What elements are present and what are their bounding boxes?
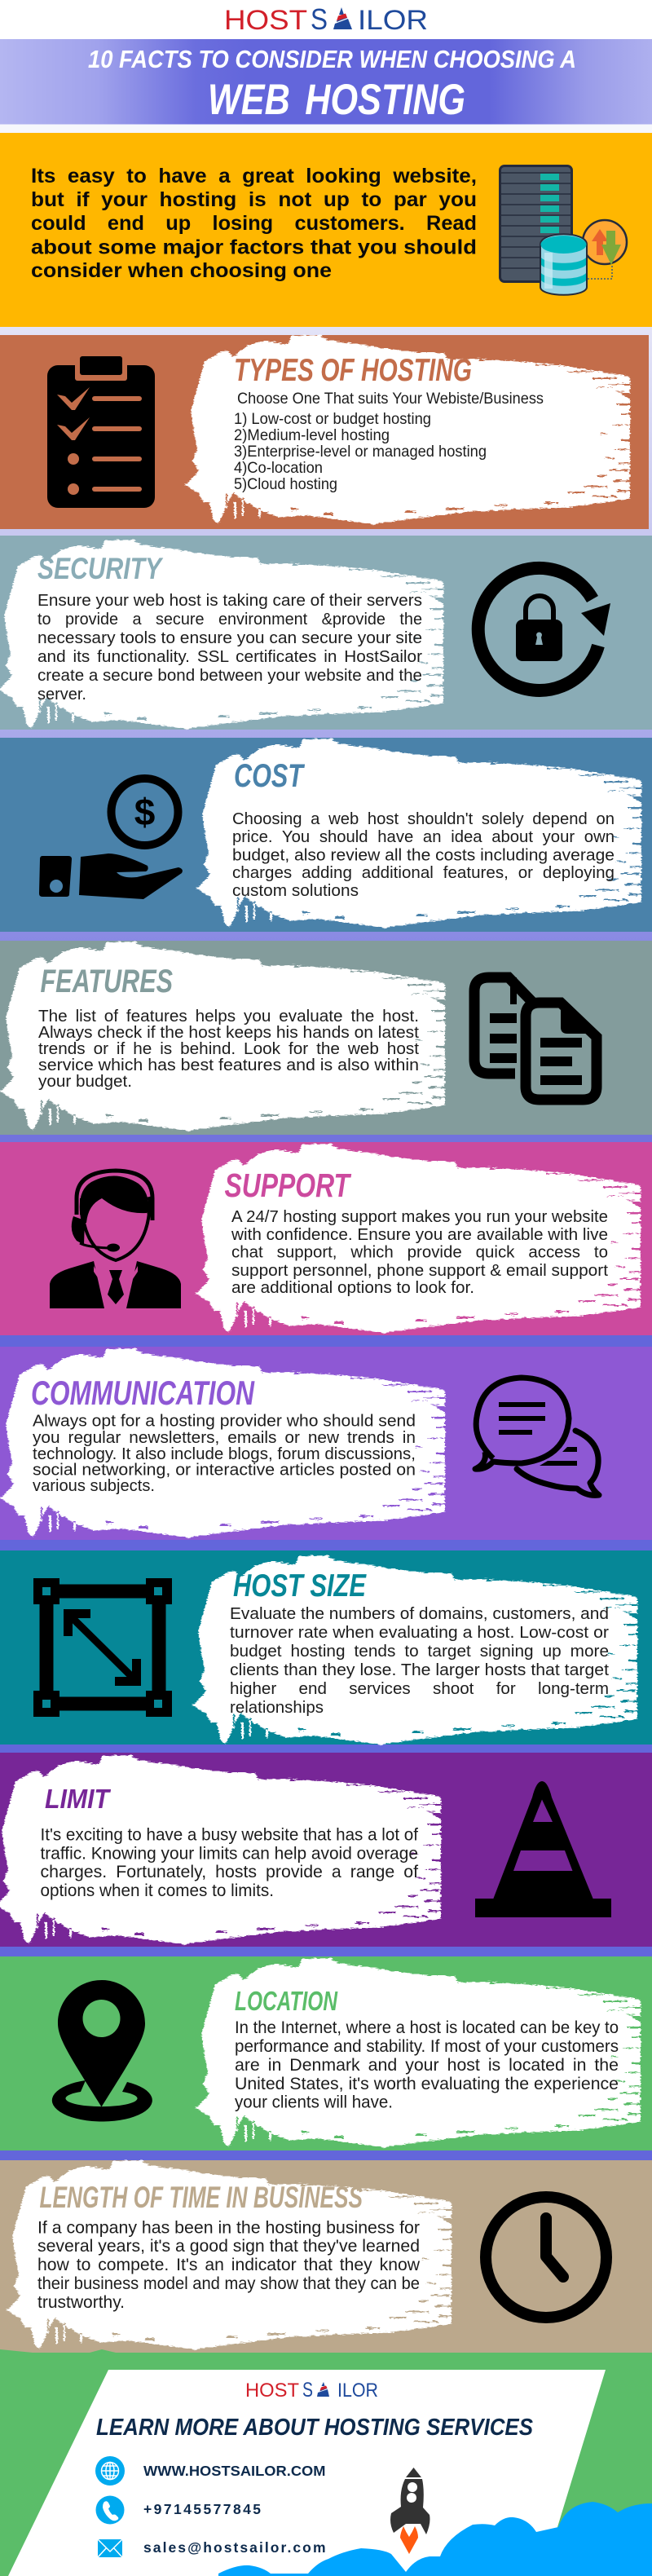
text block: are additional options to look for. bbox=[231, 1279, 474, 1297]
brush background bbox=[185, 335, 630, 524]
brush background bbox=[0, 1348, 445, 1537]
text block: social networking, or interactive articles posted on bbox=[33, 1461, 416, 1479]
text block: technology. It also include blogs, forum discussions, bbox=[33, 1445, 416, 1463]
brush background bbox=[196, 739, 641, 928]
icon: documents bbox=[474, 977, 597, 1100]
text block bbox=[232, 810, 615, 900]
text block: Evaluate the numbers of domains, customers, and bbox=[230, 1605, 609, 1623]
text block: with confidence. Ensure you are available with live bbox=[231, 1226, 608, 1244]
text block: support personnel, phone support & email support bbox=[231, 1262, 608, 1280]
contact: website: WWW.HOSTSAILOR.COM bbox=[143, 2463, 326, 2479]
text block: various subjects. bbox=[33, 1477, 155, 1495]
heading: COMMUNICATION bbox=[31, 1374, 255, 1412]
panel: features bbox=[0, 941, 652, 1135]
panel: length of time in business bbox=[0, 2160, 652, 2353]
intro text: but if your hosting is not up to par you bbox=[31, 188, 477, 211]
panel: types of hosting bbox=[0, 335, 649, 529]
contact: email: sales@hostsailor.com bbox=[143, 2539, 326, 2556]
text block: Ensure your web host is taking care of their servers bbox=[37, 592, 422, 610]
logo: HostSailor: ILOR bbox=[337, 2380, 378, 2402]
title banner bbox=[0, 39, 652, 124]
intro text bbox=[31, 165, 477, 282]
clouds bbox=[218, 2502, 652, 2576]
title line 2: WEB HOSTING bbox=[208, 76, 465, 124]
text block: charges adding additional features, or deploying bbox=[232, 864, 615, 882]
text block: create a secure bond between your website and the bbox=[37, 667, 422, 685]
text block bbox=[235, 2018, 619, 2111]
text block: hosting types: 3)Enterprise-level or managed hosting bbox=[234, 443, 487, 461]
brush background bbox=[0, 942, 445, 1131]
text block bbox=[33, 1412, 416, 1495]
icon: traffic cone bbox=[475, 1781, 611, 1917]
icon: resize frame bbox=[33, 1578, 172, 1717]
icon: server and database bbox=[499, 165, 627, 295]
text block: charges. Fortunately, hosts provide a range of bbox=[41, 1863, 418, 1881]
text block: necessary tools to ensure you can secure your site bbox=[37, 629, 422, 647]
intro text: Its easy to have a great looking website, bbox=[31, 165, 477, 187]
panel: location bbox=[0, 1956, 652, 2150]
text block: It's exciting to have a busy website that has a lot of bbox=[41, 1826, 418, 1844]
logo: HostSailor header: HOST bbox=[224, 5, 307, 36]
text block bbox=[37, 2219, 421, 2312]
text block bbox=[41, 1826, 418, 1900]
text block: options when it comes to limits. bbox=[41, 1881, 274, 1900]
text block: higher end services shoot for long-term bbox=[230, 1680, 609, 1698]
text block: traffic. Knowing your limits can help avoid overage bbox=[41, 1844, 418, 1864]
contact: phone: +97145577845 bbox=[143, 2501, 261, 2517]
text block: are in Denmark and your host is located in the bbox=[235, 2056, 619, 2075]
heading: LENGTH OF TIME IN BUSINESS bbox=[39, 2181, 363, 2214]
text block: budget hosting tends to target signing up more bbox=[230, 1643, 609, 1661]
text block: trends or if he is behind. Look for the web host bbox=[38, 1040, 419, 1058]
text block: hosting types: Choose One That suits Your Webiste/Business bbox=[237, 390, 544, 408]
brush background bbox=[0, 540, 443, 729]
logo: HostSailor: S bbox=[302, 2379, 313, 2402]
panel: support bbox=[0, 1142, 652, 1335]
text block: relationships bbox=[230, 1699, 324, 1717]
text block: to provide a secure environment &provide the bbox=[37, 611, 422, 629]
heading: COST bbox=[234, 758, 306, 794]
text block: your clients will have. bbox=[235, 2093, 393, 2111]
text block: hosting types bbox=[234, 390, 544, 493]
text block: Always opt for a hosting provider who should send bbox=[33, 1412, 416, 1430]
text block: how to compete. It's an indicator that they know bbox=[37, 2256, 421, 2274]
icon: support agent bbox=[50, 1171, 181, 1308]
text block: hosting types: 1) Low-cost or budget hosting bbox=[234, 411, 431, 428]
heading: LOCATION bbox=[235, 1986, 338, 2016]
text block: hosting types: 4)Co-location bbox=[234, 460, 323, 477]
icon: chat bubbles bbox=[475, 1378, 599, 1495]
icon: clipboard bbox=[47, 356, 155, 508]
brush background bbox=[7, 2160, 452, 2349]
intro text: could end up losing customers. Read bbox=[31, 212, 477, 235]
contact: website bbox=[95, 2456, 326, 2486]
footer heading: LEARN MORE ABOUT HOSTING SERVICES bbox=[96, 2415, 534, 2441]
heading: LIMIT bbox=[45, 1784, 112, 1814]
text block: service which has best features and is also within bbox=[38, 1056, 419, 1074]
panel: limit bbox=[0, 1753, 652, 1947]
text block: performance and stability. If most of your customers bbox=[235, 2037, 619, 2056]
panel: intro bbox=[0, 133, 652, 327]
title line 1: 10 FACTS TO CONSIDER WHEN CHOOSING A bbox=[88, 45, 576, 73]
text block: budget, also review all the costs including average bbox=[232, 846, 615, 864]
text block bbox=[37, 592, 422, 704]
text block: United States, it's worth evaluating the experience bbox=[235, 2075, 619, 2093]
text block: their business model and may show that they can be bbox=[37, 2274, 420, 2293]
text block: Choosing a web host shouldn't solely depend on bbox=[232, 810, 615, 828]
logo: HostSailor: HOST bbox=[245, 2380, 299, 2402]
panel: security bbox=[0, 536, 652, 730]
text block: trustworthy. bbox=[37, 2293, 125, 2312]
icon: rocket bbox=[390, 2468, 430, 2554]
text block: your budget. bbox=[38, 1073, 132, 1091]
text block: clients than they lose. The larger hosts that target bbox=[230, 1661, 609, 1679]
icon: hand with coin: $ bbox=[134, 791, 155, 833]
text block: custom solutions bbox=[232, 882, 359, 900]
brush background bbox=[196, 1144, 641, 1333]
intro text: about some major factors that you should bbox=[31, 236, 477, 259]
text block: and its functionality. SSL certificates in HostSailor bbox=[37, 648, 422, 666]
text block: hosting types: 5)Cloud hosting bbox=[234, 476, 337, 493]
heading: FEATURES bbox=[41, 964, 173, 999]
icon: clock bbox=[486, 2197, 606, 2318]
panel: host size bbox=[0, 1550, 652, 1745]
brush background bbox=[196, 1958, 641, 2147]
logo: HostSailor header: ILOR bbox=[358, 5, 428, 36]
heading: SECURITY bbox=[37, 552, 164, 585]
text block: several years, it's a good sign that they've learned bbox=[37, 2237, 420, 2256]
text block: If a company has been in the hosting business for bbox=[37, 2219, 420, 2237]
text block: price. You should have an idea about your own bbox=[232, 828, 615, 846]
logo: HostSailor header bbox=[0, 0, 652, 39]
text block: In the Internet, where a host is located can be key to bbox=[235, 2018, 619, 2037]
text block: server. bbox=[37, 686, 86, 704]
heading: HOST SIZE bbox=[233, 1568, 367, 1603]
contact: phone bbox=[96, 2496, 261, 2524]
panel: footer bbox=[0, 2349, 652, 2576]
icon: map pin bbox=[52, 1980, 152, 2122]
text block: hosting types: 2)Medium-level hosting bbox=[234, 427, 390, 444]
text block bbox=[38, 1008, 419, 1091]
white parallelogram card bbox=[8, 2370, 606, 2576]
logo: HostSailor header: S bbox=[311, 2, 328, 36]
panel: cost bbox=[0, 738, 652, 932]
brush background bbox=[0, 1755, 441, 1944]
heading: TYPES OF HOSTING bbox=[234, 353, 472, 388]
heading: SUPPORT bbox=[225, 1167, 351, 1204]
icon: hand with coin bbox=[39, 779, 183, 899]
text block: A 24/7 hosting support makes you run your website bbox=[231, 1208, 608, 1226]
brush background bbox=[192, 1555, 637, 1745]
intro text: consider when choosing one bbox=[31, 259, 332, 282]
text block: you regular newsletters, emails or new trends in bbox=[33, 1429, 416, 1447]
text block: chat support, which provide quick access to bbox=[231, 1244, 608, 1262]
text block: The list of features helps you evaluate the host. bbox=[38, 1008, 419, 1026]
text block bbox=[231, 1208, 608, 1297]
panel: communication bbox=[0, 1347, 652, 1540]
icon: lock with arrow bbox=[478, 568, 610, 690]
text block: Always check if the host keeps his hands on latest bbox=[38, 1024, 419, 1042]
text block bbox=[230, 1605, 609, 1717]
text block: turnover rate when evaluating a host. Low-cost or bbox=[230, 1624, 609, 1642]
logo: HostSailor bbox=[245, 2379, 378, 2402]
